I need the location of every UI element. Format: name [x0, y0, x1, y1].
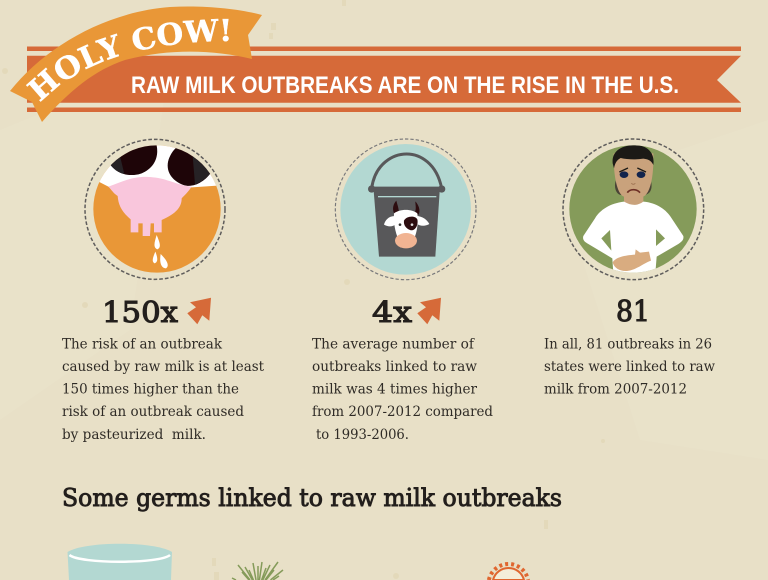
header ribbon: [27, 46, 741, 112]
header title: RAW MILK OUTBREAKS ARE ON THE RISE IN THE U.S.: [131, 72, 679, 99]
text: column 3: states were linked to raw: [544, 359, 715, 375]
text: column 1: [62, 336, 264, 443]
stat: 4x: 4x: [372, 295, 412, 329]
icon: bucket: [335, 139, 476, 280]
section heading: Some germs linked to raw milk outbreaks: [62, 484, 562, 512]
text: column 2: [312, 336, 493, 443]
text: column 1: by pasteurized milk.: [62, 427, 206, 443]
holy cow text: HOLY COW!: [26, 18, 229, 102]
text: column 1: The risk of an outbreak: [62, 336, 222, 352]
text: column 2: milk was 4 times higher: [312, 382, 477, 398]
icon: green germ: [232, 562, 283, 580]
text: column 2: outbreaks linked to raw: [312, 359, 477, 375]
icon: milk glass: [68, 544, 172, 580]
text: column 3: [544, 336, 715, 398]
icon: sick man: [563, 139, 704, 280]
text: column 1: caused by raw milk is at least: [62, 359, 264, 375]
text: column 2: from 2007-2012 compared: [312, 404, 493, 420]
text: column 2: to 1993-2006.: [316, 427, 409, 443]
text: column 1: 150 times higher than the: [62, 382, 239, 398]
icon: arrow up 1: [187, 298, 211, 324]
icon: udder: [85, 139, 227, 279]
text: column 3: milk from 2007-2012: [544, 382, 687, 398]
holy cow banner: [10, 6, 262, 122]
stat: 150x: 150x: [102, 295, 178, 329]
text: column 1: risk of an outbreak caused: [62, 404, 244, 420]
stat: 81: 81: [616, 294, 650, 328]
text: column 2: The average number of: [312, 336, 476, 352]
text: column 3: In all, 81 outbreaks in 26: [544, 336, 712, 352]
icon: arrow up 2: [417, 298, 441, 324]
icon: orange germ: [489, 564, 528, 580]
